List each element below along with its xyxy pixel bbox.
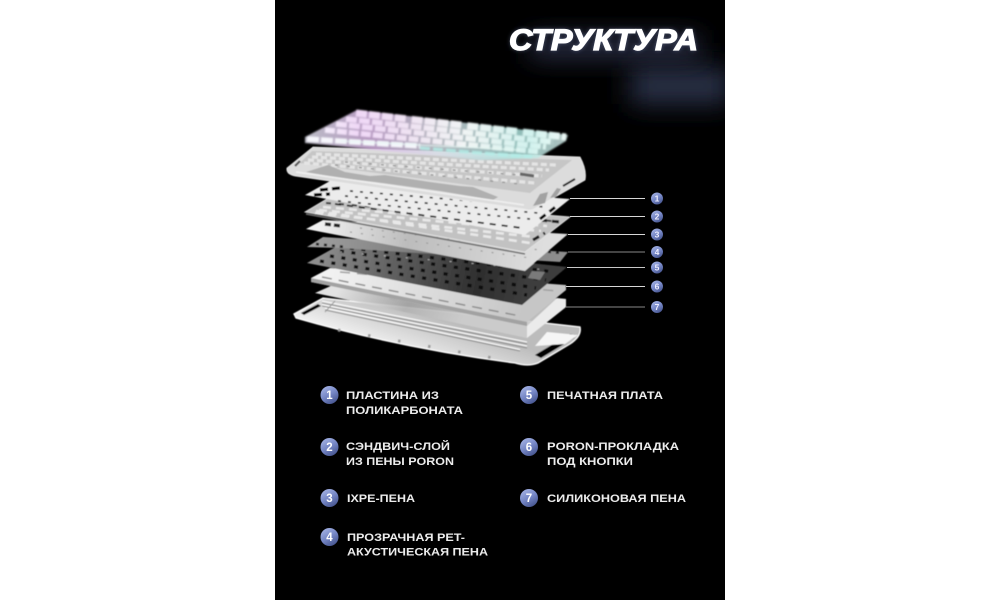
layer 3: IXPE foam bbox=[306, 220, 568, 271]
legend item 2: СЭНДВИЧ-СЛОЙ bbox=[346, 440, 450, 453]
diagram number badges: 7 bbox=[655, 302, 660, 312]
legend item 2: ИЗ ПЕНЫ PORON bbox=[346, 456, 454, 468]
diagram number badges: 2 bbox=[655, 212, 660, 222]
layer 4: transparent PET foam bbox=[307, 237, 568, 262]
legend item 4 bbox=[320, 528, 488, 558]
legend item 7: СИЛИКОНОВАЯ ПЕНА bbox=[547, 493, 686, 505]
diagram number badges: 4 bbox=[655, 247, 660, 257]
legend item 6: 6 bbox=[526, 442, 532, 454]
layer: top case bbox=[287, 147, 585, 210]
legend item 4: 4 bbox=[326, 532, 333, 544]
layer 6: Poron pad bbox=[311, 268, 566, 326]
legend item 7: 7 bbox=[526, 493, 532, 505]
layer 2: Poron sandwich foam bbox=[305, 197, 570, 254]
legend item 2 bbox=[320, 438, 454, 468]
legend item 1 bbox=[320, 386, 463, 417]
leader lines bbox=[566, 198, 645, 307]
legend item 6 bbox=[520, 438, 679, 468]
background panel bbox=[275, 0, 725, 600]
diagram number badges: 1 bbox=[655, 194, 660, 204]
layer: bottom case bbox=[294, 298, 580, 365]
layer: transparent keycaps bbox=[305, 110, 568, 160]
legend item 7 bbox=[520, 489, 686, 507]
layer 7: silicone foam bbox=[315, 285, 566, 338]
diagram number badges: 3 bbox=[655, 230, 660, 240]
legend item 3 bbox=[320, 489, 415, 507]
title glow bbox=[530, 38, 730, 104]
legend item 1: ПЛАСТИНА ИЗ bbox=[346, 390, 439, 402]
diagram number badges: 6 bbox=[655, 282, 660, 292]
title: СТРУКТУРА bbox=[509, 24, 698, 57]
legend item 1: 1 bbox=[326, 390, 333, 402]
legend item 3: IXPE-ПЕНА bbox=[347, 493, 415, 505]
legend item 4: АКУСТИЧЕСКАЯ ПЕНА bbox=[347, 546, 488, 558]
legend item 5: ПЕЧАТНАЯ ПЛАТА bbox=[547, 390, 663, 402]
diagram number badges bbox=[651, 192, 663, 313]
legend item 1: ПОЛИКАРБОНАТА bbox=[346, 405, 463, 417]
diagram number badges: 5 bbox=[655, 262, 660, 272]
layer 5: circuit board bbox=[307, 243, 567, 305]
legend item 5: 5 bbox=[526, 390, 533, 402]
legend item 5 bbox=[520, 386, 663, 404]
layer 1: polycarbonate plate bbox=[305, 181, 570, 235]
title: СТРУКТУРА bbox=[509, 24, 698, 57]
legend item 4: ПРОЗРАЧНАЯ PET- bbox=[347, 532, 465, 544]
legend item 2: 2 bbox=[326, 442, 333, 454]
legend item 6: PORON-ПРОКЛАДКА bbox=[547, 441, 679, 453]
exploded keyboard diagram bbox=[287, 110, 585, 365]
legend item 6: ПОД КНОПКИ bbox=[547, 456, 633, 468]
legend item 3: 3 bbox=[326, 493, 333, 505]
